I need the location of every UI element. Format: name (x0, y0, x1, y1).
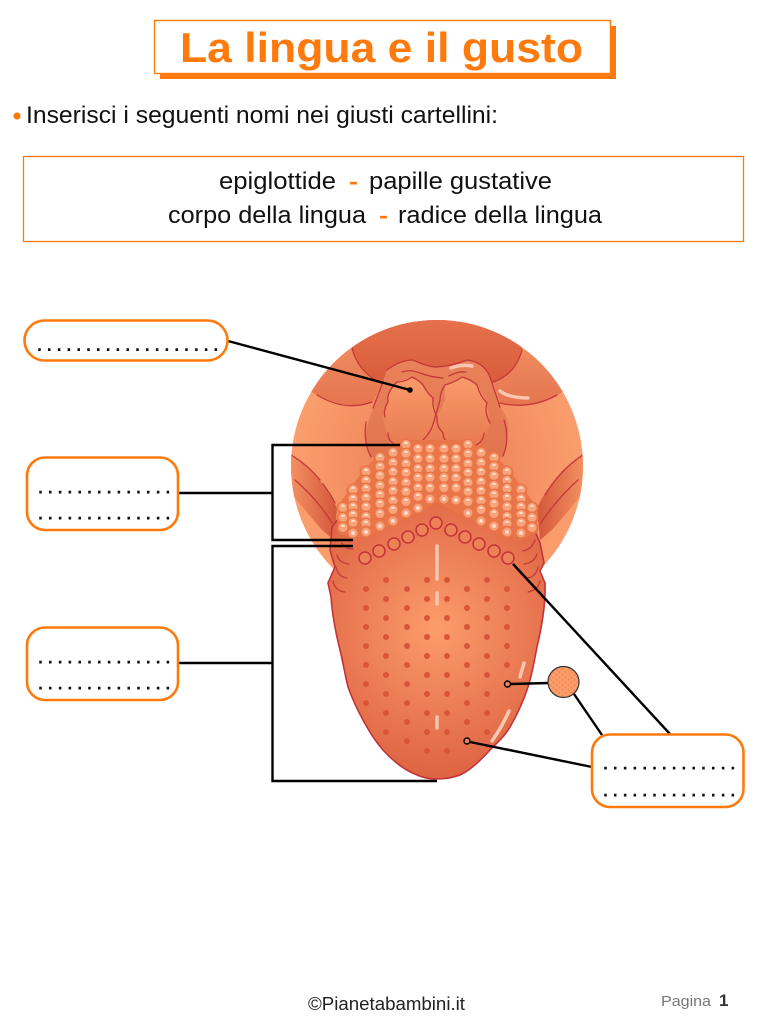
word bank box: corpo della lingua (168, 202, 367, 229)
tongue body (328, 485, 545, 779)
label box: root: .............. (38, 504, 175, 524)
title (154, 20, 616, 79)
instruction text: Inserisci i seguenti nomi nei giusti cartellini: (26, 102, 498, 129)
connector: epiglottis (228, 341, 413, 393)
label box: taste buds: .............. (603, 754, 740, 774)
throat background circle (291, 320, 583, 612)
connector: taste buds (464, 564, 670, 767)
tongue highlights (437, 546, 524, 741)
label box: taste buds: .............. (603, 780, 740, 800)
connector: body bracket (178, 546, 437, 781)
label box: epiglottis: ................... (37, 335, 223, 355)
page number: 1 (719, 991, 728, 1010)
label box: epiglottis (24, 320, 228, 360)
label box: body: .............. (38, 674, 175, 694)
epiglottis (365, 360, 528, 457)
cluster of lingual papillae (336, 438, 538, 540)
label box: body (27, 628, 178, 700)
fungiform papillae dots (363, 577, 510, 754)
footer credit: ©Pianetabambini.it (308, 994, 465, 1014)
word bank box: - (379, 203, 388, 228)
word bank box (24, 156, 744, 242)
connector: root bracket (178, 445, 400, 540)
label box: taste buds (592, 734, 744, 807)
palate and side bands (285, 310, 590, 540)
tongue illustration (285, 310, 590, 779)
tongue creases (333, 540, 540, 592)
ring of circumvallate papillae (359, 517, 514, 564)
label box: body: .............. (38, 648, 175, 668)
word bank box: papille gustative (369, 168, 552, 195)
word bank box: radice della lingua (398, 202, 603, 229)
label box: root (27, 458, 178, 530)
title: La lingua e il gusto (180, 24, 583, 71)
page number: Pagina (661, 993, 712, 1010)
page number (661, 991, 728, 1010)
label box: root: .............. (38, 478, 175, 498)
word bank box: - (349, 169, 358, 194)
word bank box: epiglottide (219, 168, 336, 195)
magnified taste bud (548, 666, 579, 698)
